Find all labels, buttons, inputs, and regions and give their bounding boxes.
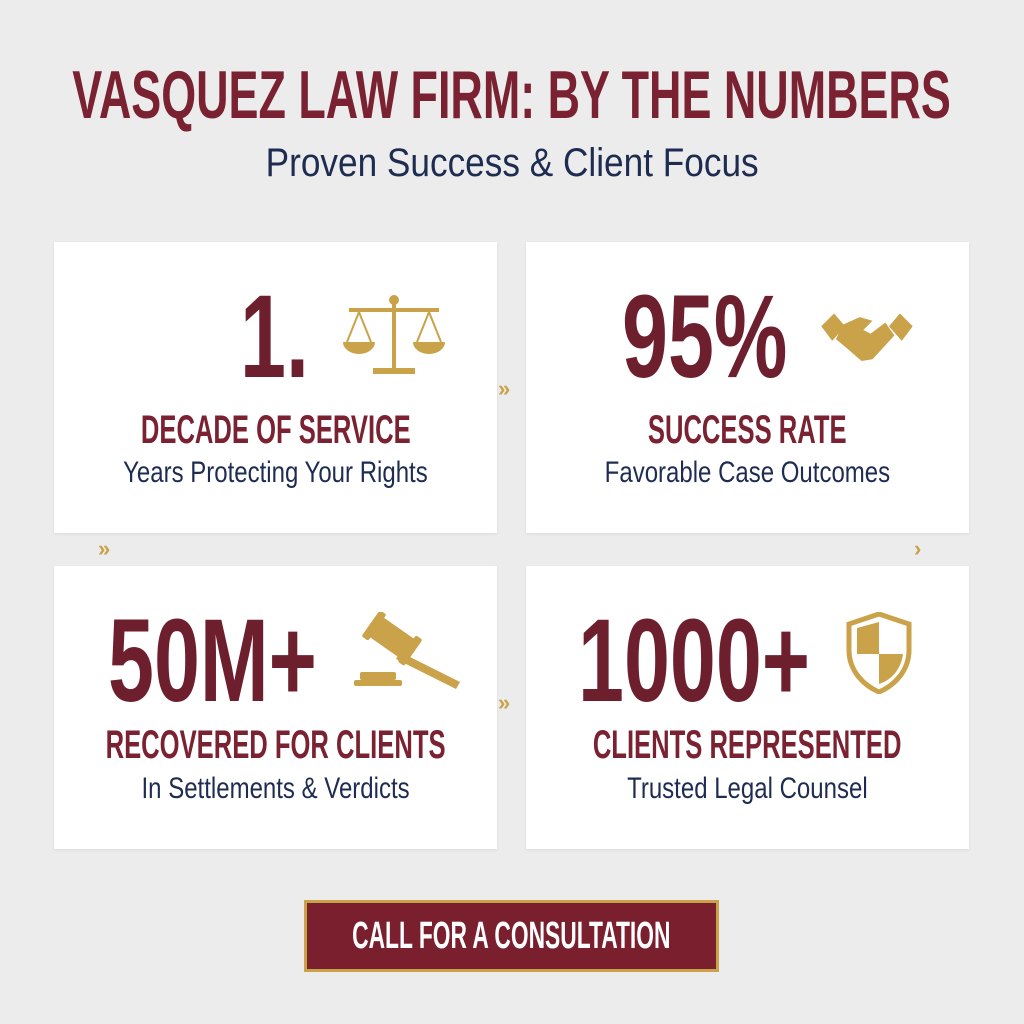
panel: decade of service <box>54 242 497 533</box>
arrow: chevron 4: » <box>498 690 510 715</box>
arrow: chevron 1: » <box>498 376 510 401</box>
number: 1000+: 1000+ <box>578 595 810 727</box>
subtext: In Settlements & Verdicts <box>141 772 410 805</box>
panel: recovered <box>54 566 497 849</box>
title: VASQUEZ LAW FIRM: BY THE NUMBERS <box>73 57 951 133</box>
subtitle: Proven Success & Client Focus <box>265 141 758 185</box>
button: call for consultation <box>304 900 719 972</box>
icon: shield <box>846 612 912 694</box>
number: 1.: 1. <box>240 271 309 403</box>
icon: handshake <box>821 314 913 361</box>
arrow: chevron 3: › <box>914 536 921 561</box>
label: CLIENTS REPRESENTED <box>593 723 902 767</box>
subtext: Favorable Case Outcomes <box>605 456 890 489</box>
button: call for consultation: CALL FOR A CONSULTATION <box>352 915 671 957</box>
panel: success rate <box>526 242 969 533</box>
number: 95%: 95% <box>622 271 787 403</box>
label: DECADE OF SERVICE <box>141 408 410 452</box>
subtext: Years Protecting Your Rights <box>123 456 428 489</box>
number: 50M+: 50M+ <box>108 595 317 727</box>
label: RECOVERED FOR CLIENTS <box>106 723 445 767</box>
label: SUCCESS RATE <box>648 408 847 452</box>
arrow: chevron 2: » <box>98 536 110 561</box>
panel: clients represented <box>526 566 969 849</box>
icon: gavel <box>354 612 460 689</box>
subtext: Trusted Legal Counsel <box>627 772 868 805</box>
icon: scales <box>343 295 445 374</box>
